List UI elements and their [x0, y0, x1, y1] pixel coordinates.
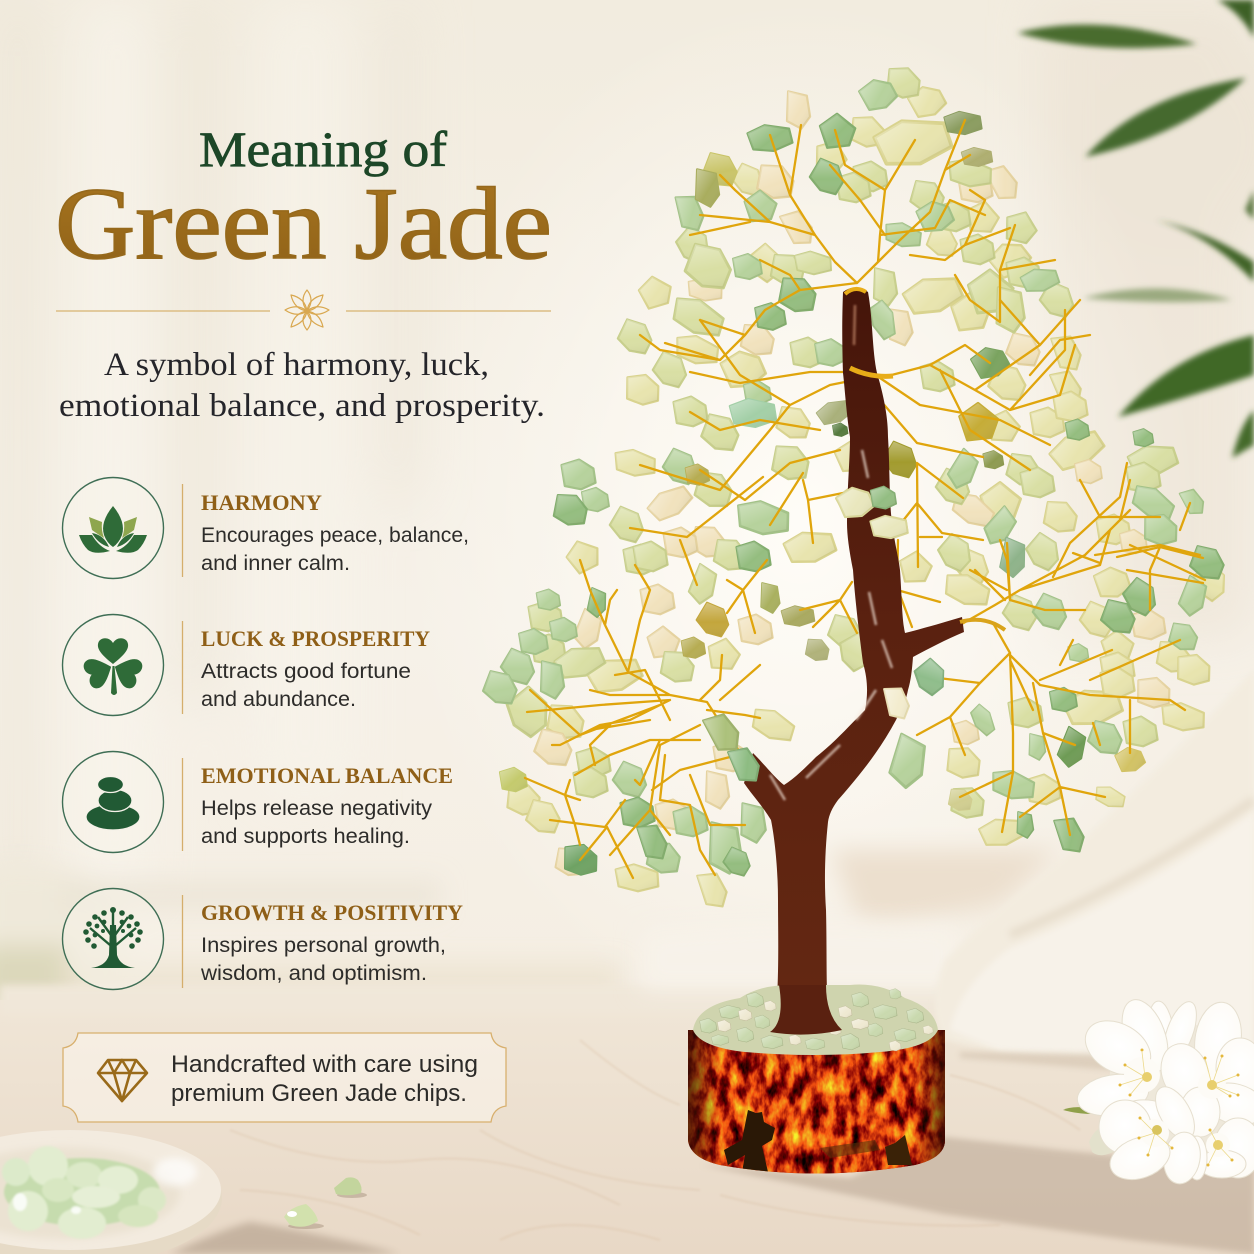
leaf and bud — [1063, 1107, 1120, 1155]
stamens — [1118, 1048, 1240, 1166]
description: emotional balance — [201, 797, 433, 848]
description: emotional balance: and supports healing. — [201, 825, 410, 848]
callout text: premium Green Jade chips. — [171, 1080, 467, 1107]
heading: harmony: HARMONY — [201, 490, 322, 515]
item: growth and positivity — [62, 888, 463, 990]
marble table — [0, 1000, 1254, 1254]
title: Meaning of: Meaning of — [199, 121, 447, 177]
description: harmony: Encourages peace, balance, — [201, 524, 469, 547]
base shadow on table — [700, 1137, 1254, 1254]
trunk gloss — [770, 305, 892, 800]
description: luck and prosperity — [201, 660, 411, 711]
callout text: Handcrafted with care using — [171, 1051, 478, 1078]
description: luck and prosperity: and abundance. — [201, 688, 356, 711]
description: harmony — [201, 524, 469, 575]
gem tree — [479, 64, 1232, 1180]
divider with lotus ornament — [56, 290, 551, 330]
subtitle: emotional balance, and prosperity. — [59, 388, 545, 424]
description: growth and positivity: Inspires personal growth, — [201, 934, 446, 957]
icon: stacked stones — [62, 752, 164, 852]
trunk — [744, 288, 1005, 1032]
flower cluster right — [1153, 999, 1254, 1137]
curtain folds — [0, 0, 1254, 900]
gold wires — [525, 120, 1205, 878]
description: growth and positivity — [200, 934, 446, 985]
panel: text column — [55, 121, 552, 1122]
flower cluster top left — [1074, 993, 1203, 1121]
shaded backing between petals — [1110, 1020, 1254, 1170]
wooden base — [686, 1028, 948, 1180]
left soft fabric — [0, 864, 620, 1030]
marble veins — [230, 1040, 1080, 1240]
gravel of jade chips — [693, 985, 938, 1055]
description: harmony: and inner calm. — [201, 552, 350, 575]
jade chips: pale green — [479, 75, 1211, 877]
icon: tree — [62, 888, 164, 990]
icon: lotus — [62, 478, 164, 578]
bamboo leaves — [1017, 0, 1254, 458]
heading: emotional balance: EMOTIONAL BALANCE — [201, 763, 453, 788]
subtitle — [59, 347, 545, 424]
flower lower centre — [1099, 1080, 1204, 1187]
icon: clover — [62, 614, 164, 716]
description: emotional balance: Helps release negativity — [201, 797, 433, 820]
bright glow behind tree — [400, 0, 1200, 1040]
front chips over trunk — [702, 484, 951, 787]
loose jade chip 2 — [284, 1204, 324, 1229]
item: harmony — [62, 478, 469, 578]
callout text — [171, 1051, 478, 1107]
heading: luck and prosperity: LUCK & PROSPERITY — [201, 626, 430, 651]
flower lower right — [1187, 1118, 1254, 1180]
loose jade chip 1 — [334, 1177, 367, 1198]
chips in plate — [2, 1146, 166, 1239]
item: emotional balance — [62, 752, 453, 852]
title: Green Jade: Green Jade — [55, 167, 552, 281]
description: luck and prosperity: Attracts good fortune — [201, 660, 411, 683]
recessed wall shade behind tree base — [830, 850, 1060, 925]
plate of jade chips — [0, 1130, 222, 1254]
towel — [640, 670, 1254, 1070]
item: luck and prosperity — [62, 614, 430, 716]
heading: growth and positivity: GROWTH & POSITIVITY — [201, 900, 463, 925]
jade chips: deep green — [550, 114, 1230, 880]
white flowers — [1063, 993, 1254, 1187]
jade chips: warm cream — [529, 91, 1173, 880]
jade chips: olive and amber — [500, 112, 1147, 814]
plate shadow — [170, 1222, 400, 1254]
jade chips: cream yellow — [503, 82, 1232, 911]
subtitle: A symbol of harmony, luck, — [104, 347, 489, 383]
callout: handcrafted — [63, 1033, 506, 1122]
jade chips: light yellow green — [501, 64, 1179, 821]
description: growth and positivity: wisdom, and optimism. — [200, 962, 427, 985]
icon: diamond — [98, 1060, 147, 1101]
